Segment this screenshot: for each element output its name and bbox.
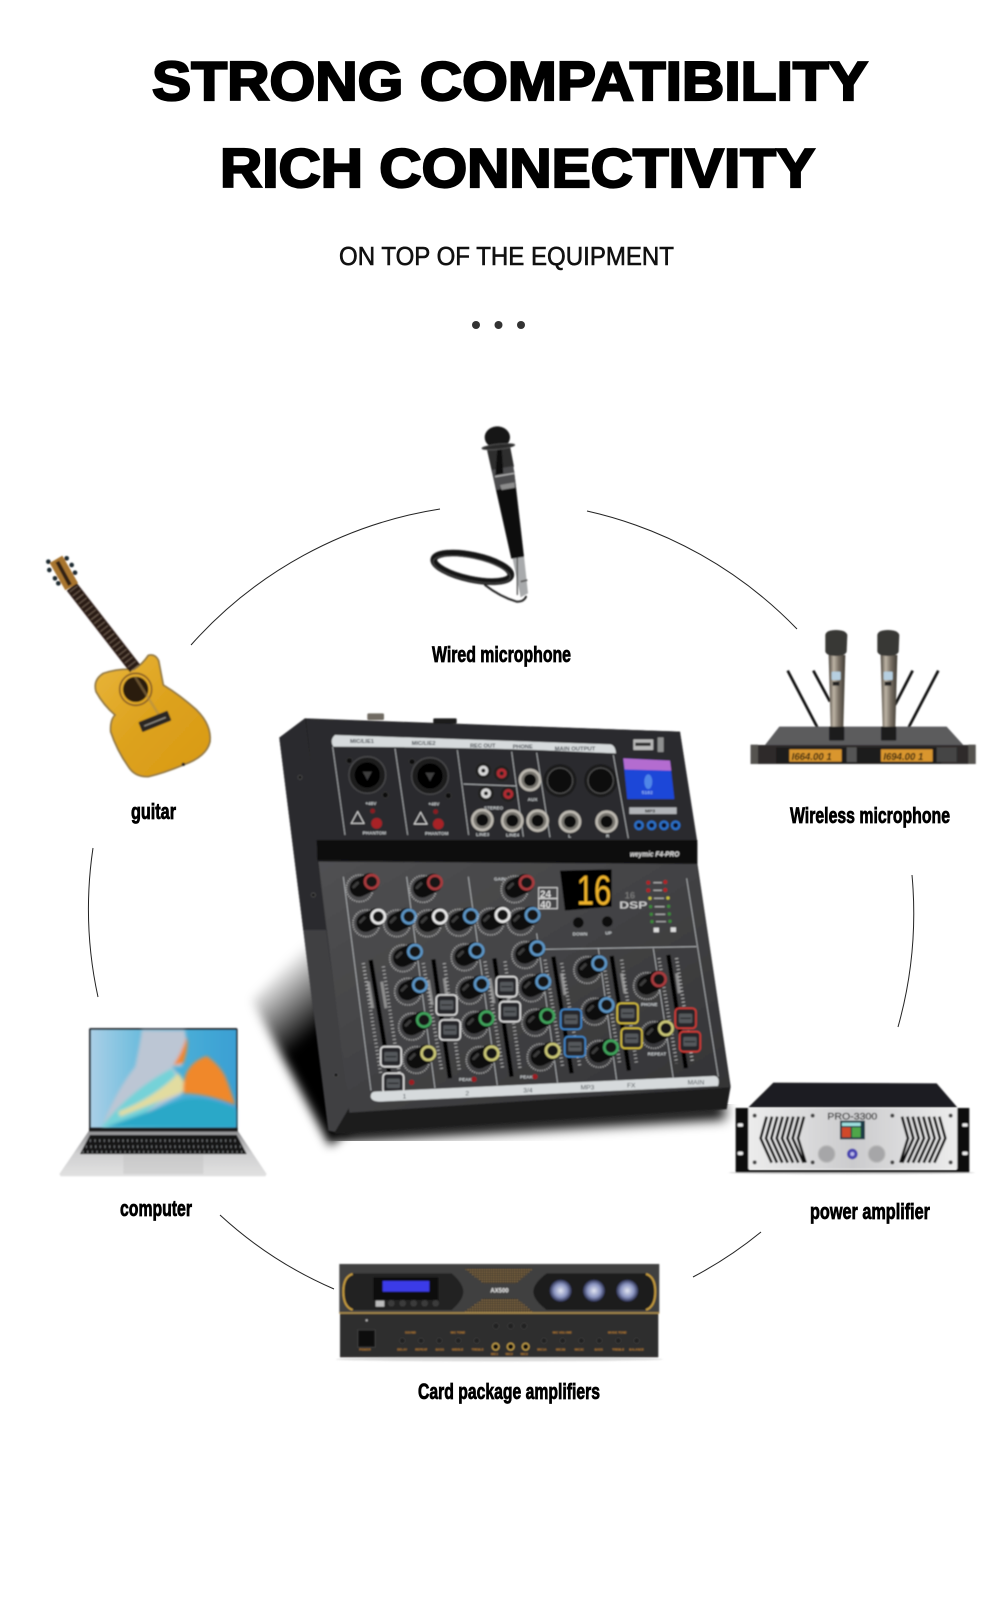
icon: card package amplifier: BASS	[436, 1348, 444, 1352]
bottom label band	[371, 1076, 719, 1102]
fader scales	[363, 958, 693, 1073]
dots divider	[472, 321, 525, 329]
channel labels	[403, 1080, 704, 1101]
icon: card package amplifier: BALANCE	[629, 1348, 644, 1352]
phantom switches: +48V	[365, 801, 377, 806]
right knob recess	[533, 1273, 656, 1310]
24/40 bit and dsp badges: DSP	[619, 900, 648, 911]
channel labels: FX	[627, 1083, 636, 1090]
input labels: MIC/LIE2	[412, 741, 436, 747]
channel labels: 1	[403, 1094, 407, 1101]
channel labels: 2	[465, 1090, 469, 1097]
icon: card package amplifier: MIC VOLUME	[553, 1330, 572, 1334]
rca and jacks: STEREO	[484, 805, 504, 810]
icon: wired microphone	[431, 426, 528, 602]
level meter	[646, 880, 676, 932]
usb and lcd player: MP3	[645, 809, 655, 815]
label: guitar: guitar	[131, 799, 176, 824]
icon: card package amplifier: MIC1	[491, 1352, 498, 1356]
icon: card package amplifier: SOUND	[405, 1330, 417, 1334]
icon: card package amplifier: MIDDLE	[452, 1348, 463, 1352]
peak leds: PHONE	[641, 1002, 658, 1007]
input labels: PHONE	[513, 745, 533, 751]
icon: power amplifier: PRO-3300	[827, 1111, 877, 1121]
label: computer: computer	[120, 1196, 192, 1221]
seven segment display: 16	[577, 868, 611, 914]
rca and jacks: L	[568, 833, 571, 838]
icon: card package amplifier: POWER	[359, 1348, 371, 1352]
title	[152, 50, 868, 199]
icon: card package amplifier: MIC2	[506, 1352, 513, 1356]
icon: card package amplifier: MIC TONE	[451, 1330, 465, 1334]
icon: card package amplifier: TREBLE	[472, 1348, 484, 1352]
24/40 bit and dsp badges: 16	[625, 891, 635, 901]
peak leds: GAIN	[494, 877, 506, 882]
fader slots	[371, 955, 686, 1088]
title: STRONG COMPATIBILITY	[152, 50, 868, 112]
down and up buttons: UP	[605, 931, 612, 936]
icon: card package amplifier: REPEAT	[415, 1348, 427, 1352]
right handheld mic	[877, 630, 899, 741]
brand: weymic F4-PRO	[630, 850, 679, 859]
label: power amplifier: power amplifier	[810, 1199, 930, 1224]
rca and jacks: R	[606, 834, 610, 839]
icon: card package amplifier	[336, 1264, 663, 1361]
fader caps	[381, 977, 700, 1093]
subtitle: ON TOP OF THE EQUIPMENT	[339, 241, 674, 271]
left display recess	[343, 1273, 463, 1310]
title: RICH CONNECTIVITY	[220, 137, 815, 199]
left handheld mic	[825, 630, 847, 741]
input labels	[350, 739, 596, 752]
rca and jacks	[471, 763, 618, 839]
mixer	[279, 713, 731, 1134]
top connectors on rear edge	[367, 713, 457, 724]
input labels: MAIN OUTPUT	[555, 746, 596, 752]
knobs	[346, 875, 673, 1073]
seven segment display	[560, 868, 612, 914]
peak leds	[409, 877, 666, 1085]
main output xlr	[543, 764, 617, 797]
channel labels: 3/4	[523, 1088, 533, 1095]
top label band	[332, 735, 616, 753]
mixer drop shadow	[252, 935, 725, 1146]
icon: card package amplifier: MIC2B	[556, 1348, 566, 1352]
phantom switches: PHANTOM	[363, 830, 386, 835]
icon: laptop	[59, 1028, 267, 1176]
24/40 bit and dsp badges	[539, 888, 648, 911]
label: wired microphone: Wired microphone	[432, 642, 571, 667]
usb and lcd player: 5182	[642, 790, 653, 796]
input labels: MIC/LIE1	[350, 739, 374, 745]
rca and jacks: AUX	[528, 797, 538, 802]
down and up buttons: DOWN	[573, 931, 588, 936]
rca and jacks: LINE4	[506, 833, 520, 838]
24/40 bit and dsp badges: 24	[540, 889, 552, 900]
icon: card package amplifier: DELAY	[397, 1348, 407, 1352]
icon: card package amplifier: MIC3	[521, 1352, 528, 1356]
down and up buttons	[573, 916, 613, 936]
peak leds: PEAK	[459, 1077, 473, 1082]
icon: card package amplifier: BASS	[595, 1348, 603, 1352]
icon: power amplifier	[728, 1083, 975, 1174]
usb and lcd player	[623, 737, 679, 829]
icon: card package amplifier: MIC3C	[575, 1348, 585, 1352]
channel labels: MP3	[581, 1085, 595, 1092]
phantom switches: PHANTOM	[425, 831, 449, 836]
channel labels: MAIN	[688, 1080, 704, 1087]
icon: guitar	[46, 556, 210, 777]
peak leds: REPEAT	[648, 1052, 666, 1057]
24/40 bit and dsp badges: 40	[540, 900, 552, 911]
connecting ring arcs	[88, 509, 914, 1289]
icon: card package amplifier: AX500	[490, 1289, 509, 1295]
mixer body	[279, 718, 731, 1134]
icon: wireless microphone: I694.00 1	[883, 752, 924, 763]
phantom switches: +48V	[428, 802, 440, 807]
phantom switches	[351, 801, 449, 836]
peak leds: PEAK	[520, 1074, 534, 1079]
icon: wireless microphone: I664.00 1	[792, 752, 832, 763]
label: card package amplifiers: Card package amplifiers	[418, 1379, 600, 1404]
rca and jacks: LINE3	[476, 832, 490, 837]
icon: wireless microphone	[751, 630, 976, 764]
icon: card package amplifier: MUSIC TONE	[608, 1330, 627, 1334]
side screws	[298, 775, 338, 1077]
icon: card package amplifier: MIC1A	[537, 1348, 547, 1352]
combo inputs	[346, 757, 451, 799]
input labels: REC OUT	[470, 743, 496, 749]
icon: card package amplifier: TREBLE	[612, 1348, 624, 1352]
